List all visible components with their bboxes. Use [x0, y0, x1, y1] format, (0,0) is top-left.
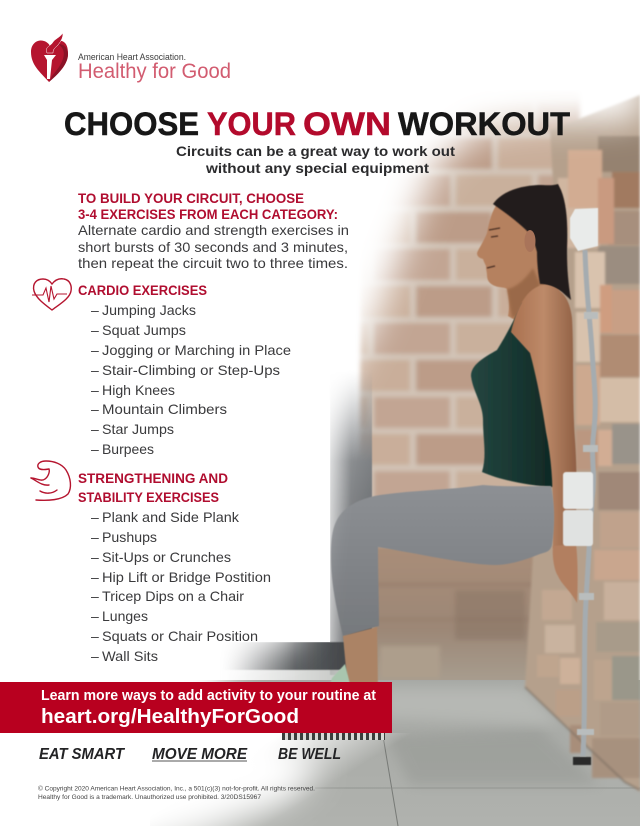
cardio exercise list: –: [91, 401, 99, 417]
cardio exercise list: –: [91, 362, 99, 378]
shoe: [330, 664, 350, 684]
tank top: [471, 303, 556, 487]
strengthening exercise list: Hip Lift or Bridge Postition: [102, 569, 271, 585]
Healthy for Good text: Healthy for Good: [78, 60, 231, 83]
subtitle: [176, 143, 455, 176]
window frame: [220, 370, 372, 682]
instructions text: [78, 222, 349, 271]
logo: [31, 33, 231, 83]
copyright: © Copyright 2020 American Heart Association, Inc., a 501(c)(3) not-for-profit. All rights reserved.: [38, 786, 315, 792]
cardio exercise list: –: [91, 382, 99, 398]
cardio exercise list: –: [91, 441, 99, 457]
instructions text: Alternate cardio and strength exercises in: [78, 222, 349, 238]
cardio heading: CARDIO EXERCISES: [78, 283, 207, 298]
face and neck: [477, 195, 560, 325]
title: [64, 106, 570, 142]
floor: [150, 680, 640, 826]
cardio exercise list: Mountain Climbers: [102, 401, 227, 417]
arm: [511, 285, 576, 548]
strengthening exercise list: –: [91, 569, 99, 585]
strengthening exercise list: Sit-Ups or Crunches: [102, 549, 231, 565]
strengthening exercise list: Wall Sits: [102, 648, 158, 664]
instructions heading: TO BUILD YOUR CIRCUIT, CHOOSE: [78, 191, 304, 206]
call-to-action banner: [0, 682, 392, 733]
cardio exercise list: –: [91, 302, 99, 318]
icon: heart with pulse: [32, 279, 71, 310]
subtitle: Circuits can be a great way to work out: [176, 143, 455, 159]
strengthening exercise list: Squats or Chair Position: [102, 628, 258, 644]
American Heart Association text: American Heart Association.: [78, 52, 186, 62]
strengthening exercise list: Pushups: [102, 529, 157, 545]
hand: [553, 544, 578, 603]
right brick wall: [525, 95, 640, 792]
ear: [524, 230, 536, 252]
icon: heart and torch: [31, 33, 68, 82]
strengthening exercise list: [91, 509, 271, 664]
cardio exercise list: High Knees: [102, 382, 175, 398]
strengthening exercise list: –: [91, 628, 99, 644]
instructions heading: 3-4 EXERCISES FROM EACH CATEGORY:: [78, 207, 338, 222]
strengthening exercise list: –: [91, 549, 99, 565]
tagline: EAT SMART: [39, 746, 125, 763]
cardio exercise list: Squat Jumps: [102, 322, 186, 338]
cardio exercise list: Jumping Jacks: [102, 302, 196, 318]
strengthening exercise list: Plank and Side Plank: [102, 509, 240, 525]
cardio exercise list: –: [91, 322, 99, 338]
instructions heading: [78, 191, 338, 222]
tagline: [39, 746, 341, 763]
tagline: MOVE MORE: [152, 746, 248, 763]
facial shading: [507, 268, 540, 318]
banner text: Learn more ways to add activity to your routine at: [41, 688, 376, 704]
instructions text: then repeat the circuit two to three times.: [78, 255, 348, 271]
banner url: heart.org/HealthyForGood: [41, 706, 299, 728]
hair: [493, 184, 571, 300]
strengthening heading: STABILITY EXERCISES: [78, 490, 219, 505]
cardio exercise list: Burpees: [102, 441, 154, 457]
cardio exercise list: Star Jumps: [102, 421, 174, 437]
subtitle: without any special equipment: [205, 160, 429, 176]
strengthening heading: STRENGTHENING AND: [78, 471, 228, 486]
copyright: Healthy for Good is a trademark. Unauthorized use prohibited. 3/20DS15967: [38, 794, 262, 801]
strengthening exercise list: –: [91, 588, 99, 604]
woman: [330, 184, 578, 690]
cardio exercise list: [91, 302, 291, 457]
leggings: [331, 485, 554, 636]
strengthening exercise list: Lunges: [102, 608, 148, 624]
instructions text: short bursts of 30 seconds and 3 minutes,: [78, 239, 348, 255]
eyebrow, eye, mouth: [487, 228, 500, 268]
title: OWN: [303, 106, 391, 142]
title: WORKOUT: [398, 106, 570, 142]
strengthening exercise list: –: [91, 529, 99, 545]
cardio exercise list: –: [91, 421, 99, 437]
strengthening exercise list: –: [91, 509, 99, 525]
strengthening exercise list: –: [91, 648, 99, 664]
cardio exercise list: Jogging or Marching in Place: [102, 342, 291, 358]
lower leg: [343, 627, 378, 690]
shoe sole: [282, 733, 385, 740]
cardio exercise list: –: [91, 342, 99, 358]
title: CHOOSE: [64, 106, 199, 142]
strengthening exercise list: Tricep Dips on a Chair: [102, 588, 244, 604]
title: YOUR: [207, 106, 296, 142]
strengthening heading: [78, 471, 228, 505]
strengthening exercise list: –: [91, 608, 99, 624]
back brick wall: [360, 90, 580, 690]
cardio exercise list: Stair-Climbing or Step-Ups: [102, 362, 280, 378]
icon: flexed arm: [31, 461, 70, 500]
wall fixtures: [563, 208, 598, 765]
tagline: BE WELL: [278, 746, 341, 763]
copyright: [38, 786, 315, 801]
